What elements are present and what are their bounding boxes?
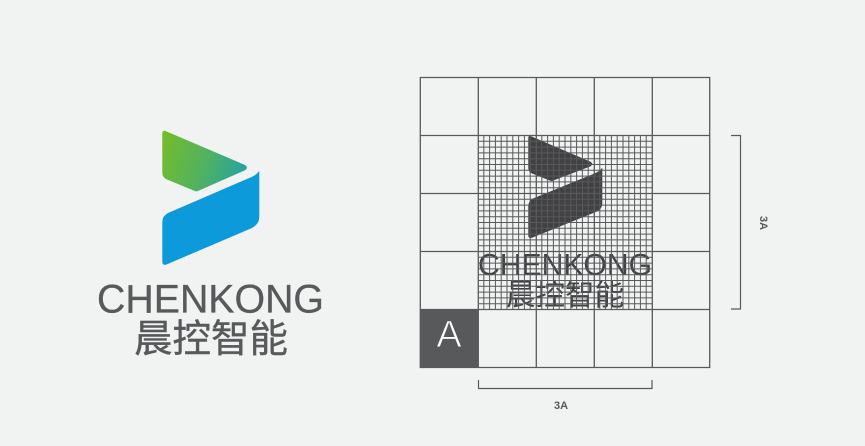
fine construction grid — [478, 136, 652, 310]
bottom bracket — [478, 380, 652, 388]
right bracket — [731, 136, 740, 309]
grey logo icon: parallelogram — [528, 168, 602, 238]
logo wordmark: CHENKONG — [97, 278, 324, 322]
construction logo in grey — [478, 136, 652, 312]
logo icon: green triangle — [162, 131, 247, 191]
grey logo icon: triangle — [528, 136, 592, 181]
logo icon: blue parallelogram — [162, 171, 259, 265]
main 5x5 grid — [420, 77, 710, 368]
unit square A — [420, 309, 478, 367]
grey logo Chinese name: 晨控智能 — [506, 279, 624, 312]
bottom 3A label: 3A — [554, 400, 568, 412]
grey logo wordmark: CHENKONG — [478, 248, 652, 282]
logo Chinese name: 晨控智能 — [134, 318, 288, 361]
unit square A: A — [436, 314, 462, 356]
right 3A label: 3A — [757, 216, 769, 230]
colour logo — [97, 131, 324, 361]
